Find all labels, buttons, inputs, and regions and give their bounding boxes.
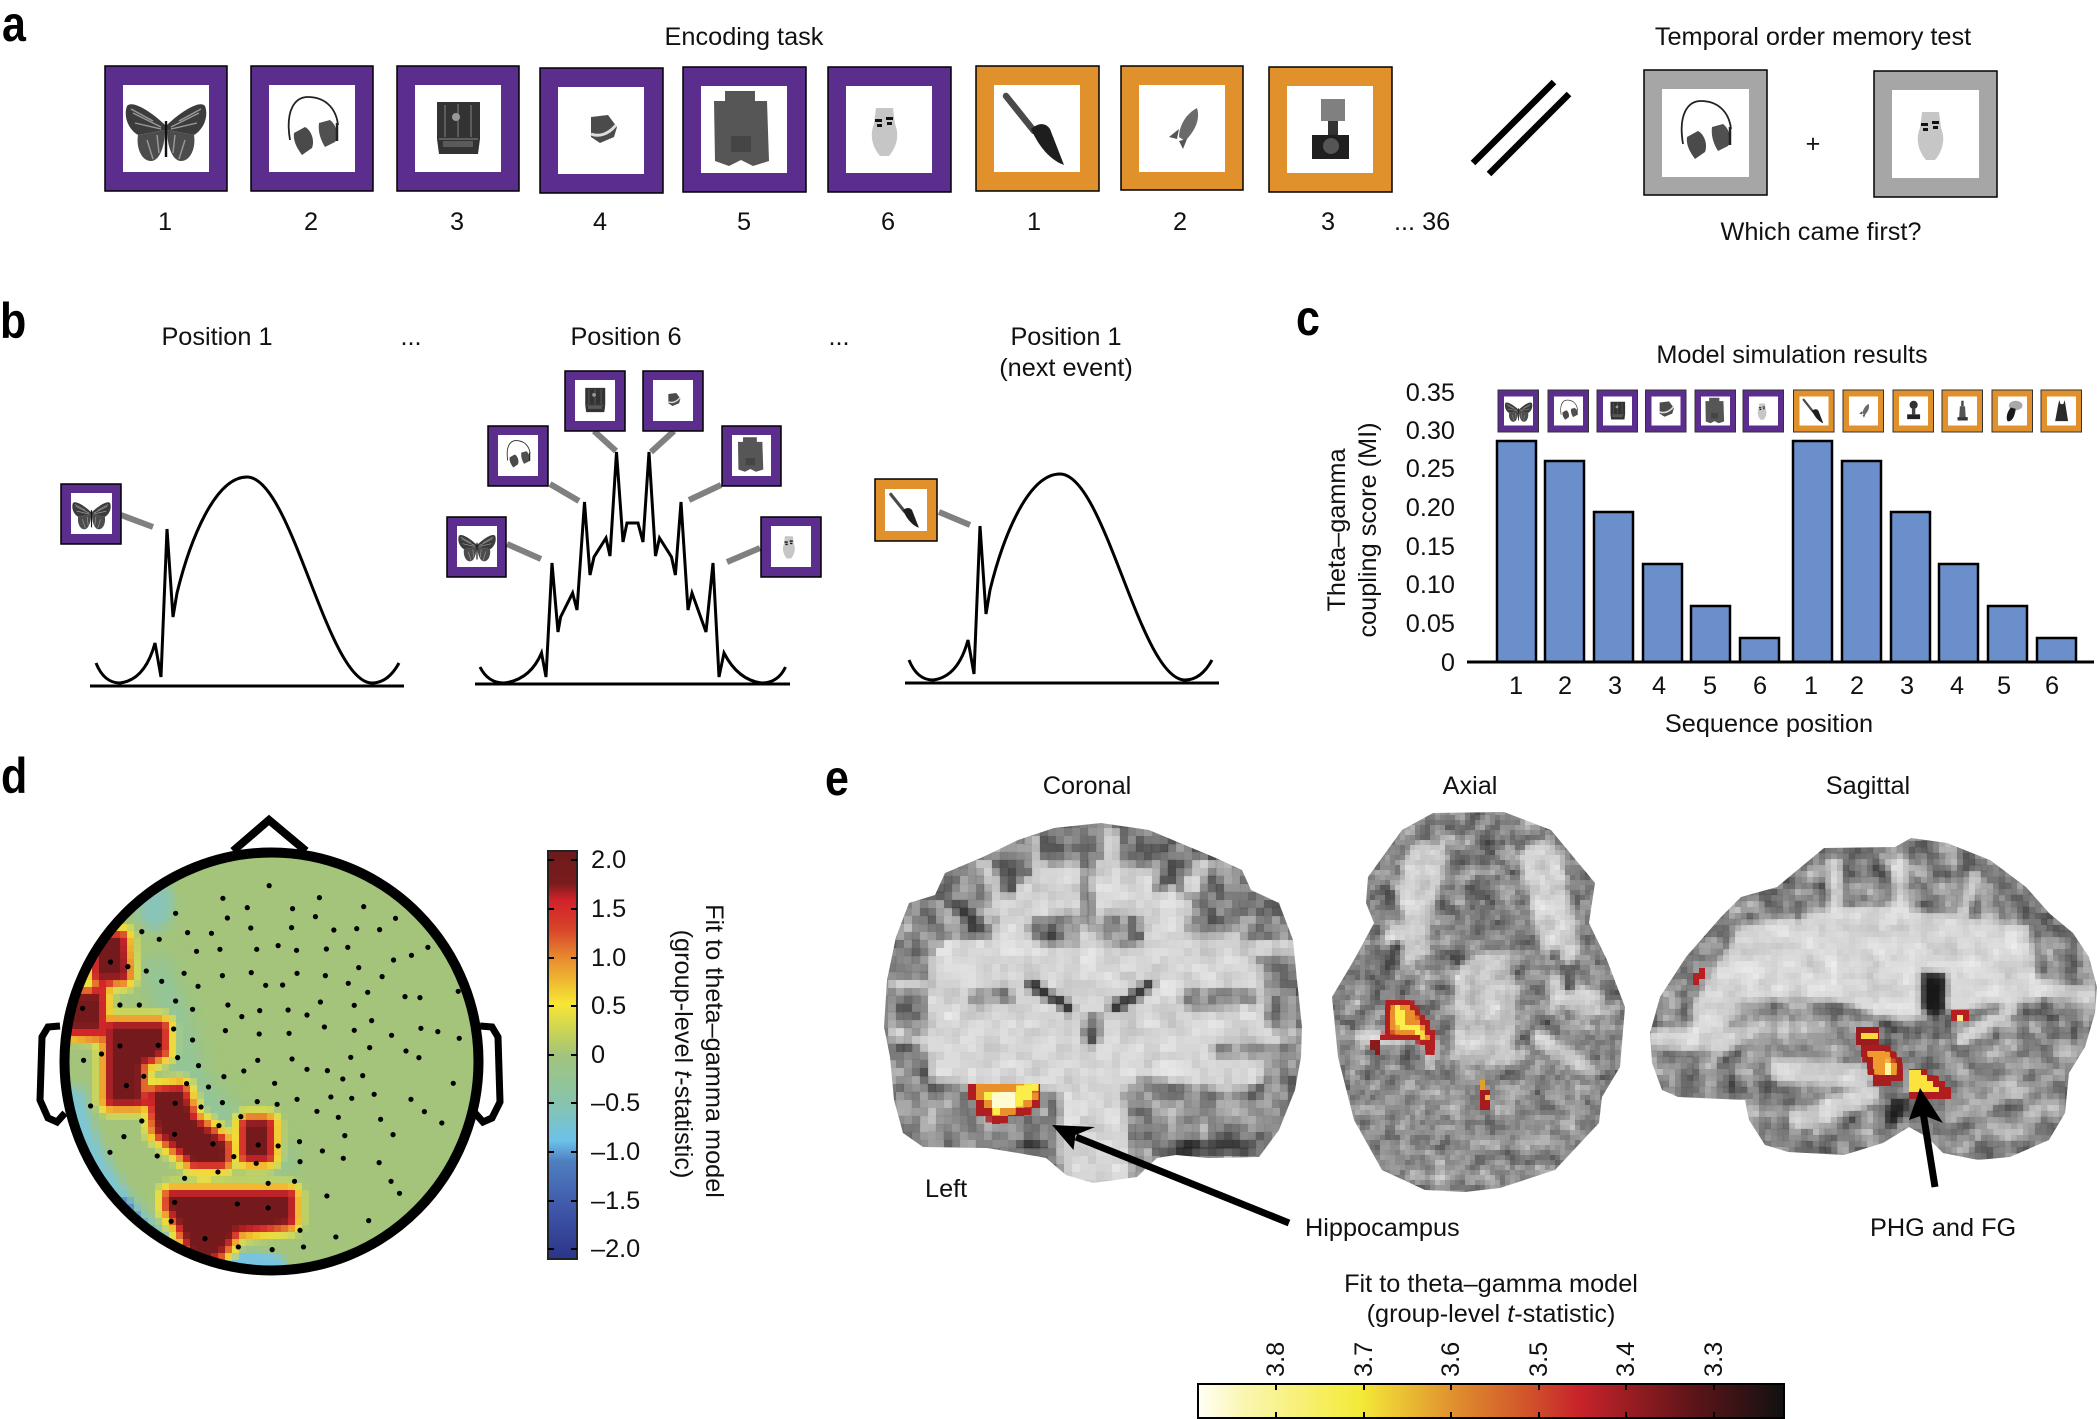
stimulus frame 1 butterfly: [105, 66, 227, 191]
colour bar title: (group-level t -statistic): [669, 930, 697, 1178]
panel: b theta waveforms: [0, 293, 1219, 686]
axial activation: [1372, 998, 1492, 1112]
stimulus frame 4 mask: [540, 68, 663, 193]
waveform position 6: [475, 452, 790, 684]
butterfly frame and connector: [61, 484, 153, 544]
x axis tick labels: 3: [1900, 672, 1914, 700]
heading axial: Axial: [1443, 772, 1497, 800]
ellipsis: ...: [400, 323, 422, 351]
colour bar: [548, 851, 577, 1259]
sequence position numbers: 4: [593, 208, 607, 236]
stimulus frame 7 trowel: [976, 66, 1099, 191]
legend title: Fit to theta–gamma model: [1344, 1270, 1638, 1298]
colour bar title: Fit to theta–gamma model: [700, 904, 728, 1198]
legend title: (group-level t-statistic): [1367, 1300, 1615, 1328]
electrode dots: [83, 886, 459, 1250]
heading position 1: Position 1: [161, 323, 273, 351]
legend tick labels: 3.7: [1350, 1342, 1378, 1377]
frame bowling pin: [727, 517, 821, 577]
x axis tick labels: 6: [2045, 672, 2059, 700]
heading coronal: Coronal: [1043, 772, 1131, 800]
stimulus frame 6 bowling pin: [828, 67, 951, 192]
panel: a encoding task and memory test: [2, 0, 1997, 246]
waveform position 1: [90, 477, 404, 686]
sequence position numbers: 6: [881, 208, 895, 236]
x axis tick labels: 5: [1703, 672, 1717, 700]
colour bar tick labels: –2.0: [591, 1235, 640, 1263]
colour bar tick labels: 1.0: [591, 944, 626, 972]
break marks: [1473, 82, 1569, 174]
legend tick labels: 3.8: [1262, 1342, 1290, 1377]
x axis tick labels: 6: [1753, 672, 1767, 700]
y axis tick labels: 0.25: [1406, 455, 1455, 483]
icon strip: [1498, 390, 2082, 432]
y axis title: coupling score (MI): [1354, 422, 1382, 638]
x axis tick labels: 2: [1850, 672, 1864, 700]
panel: c model simulation bar chart: [1296, 290, 2094, 738]
y axis tick labels: 0.30: [1406, 417, 1455, 445]
x axis tick labels: 3: [1608, 672, 1622, 700]
x axis line: [1467, 660, 2094, 664]
stimulus frame 9 camera: [1269, 67, 1392, 192]
panel: d scalp topography: [1, 748, 728, 1286]
stimulus frame 2 headphones: [251, 66, 373, 191]
waveform next event: [905, 474, 1219, 683]
colour bar tick labels: –1.0: [591, 1138, 640, 1166]
sequence position numbers: 2: [304, 208, 318, 236]
legend tick labels: [1262, 1342, 1728, 1377]
axial brain slice: [1332, 812, 1625, 1192]
colour bar tick labels: 1.5: [591, 895, 626, 923]
y axis tick labels: 0.15: [1406, 533, 1455, 561]
test frame bowling pin: [1874, 71, 1997, 197]
heading sagittal: Sagittal: [1826, 772, 1910, 800]
panel: e fMRI slices: [825, 750, 2100, 1418]
x axis tick labels: 4: [1950, 672, 1964, 700]
sequence position numbers: 3: [450, 208, 464, 236]
colour bar tick labels: [591, 846, 640, 1263]
colour bar tick labels: –0.5: [591, 1089, 640, 1117]
heading: encoding task: Encoding task: [665, 23, 824, 51]
heading position 6: Position 6: [570, 323, 682, 351]
question text: Which came first?: [1720, 218, 1922, 246]
ellipsis: ...: [828, 323, 850, 351]
panel letter b: b: [0, 293, 26, 349]
heading position 1 next event: Position 1: [1010, 323, 1122, 351]
legend tick labels: 3.5: [1525, 1342, 1553, 1377]
arrow to PHG and FG: [1909, 1088, 1943, 1187]
frame headphones: [488, 426, 579, 501]
label left: Left: [925, 1175, 967, 1203]
y axis tick labels: 0.35: [1406, 379, 1455, 407]
legend tick labels: 3.6: [1437, 1342, 1465, 1377]
stimulus frame 5 chair: [683, 67, 806, 192]
colour bar tick labels: 2.0: [591, 846, 626, 874]
sequence position numbers: 3: [1321, 208, 1335, 236]
colour bar tick labels: 0.5: [591, 992, 626, 1020]
x axis tick labels: 5: [1997, 672, 2011, 700]
y axis tick labels: 0.10: [1406, 571, 1455, 599]
topographic map: [70, 858, 474, 1266]
frame cabinet: [565, 371, 625, 451]
x axis title: Sequence position: [1665, 710, 1873, 738]
test frame headphones: [1644, 70, 1767, 195]
y axis tick labels: 0: [1441, 649, 1455, 677]
fixation cross: +: [1806, 130, 1820, 158]
x axis tick labels: 1: [1804, 672, 1818, 700]
x axis tick labels: 4: [1652, 672, 1666, 700]
colour bar tick labels: –1.5: [591, 1187, 640, 1215]
y axis title: [1323, 422, 1382, 638]
stimulus frame 3 cabinet: [397, 66, 519, 191]
sagittal brain slice: [1640, 830, 2100, 1170]
sequence position numbers: 2: [1173, 208, 1187, 236]
chart title: Model simulation results: [1656, 341, 1928, 369]
colour bar tick labels: 0: [591, 1041, 605, 1069]
x axis tick labels: 1: [1509, 672, 1523, 700]
sequence position numbers: 5: [737, 208, 751, 236]
head outline with nose and ears: [40, 820, 500, 1270]
y axis title: Theta–gamma: [1323, 448, 1351, 612]
stimulus frame 8 rocket: [1121, 66, 1243, 190]
panel letter e: e: [825, 750, 849, 806]
y axis tick labels: [1406, 379, 1455, 677]
sequence position numbers: ... 36: [1394, 208, 1450, 236]
legend tick labels: 3.3: [1700, 1342, 1728, 1377]
frame mask: [643, 371, 703, 452]
panel letter d: d: [1, 748, 27, 804]
arrow to hippocampus: [1052, 1125, 1289, 1223]
legend colour bar: [1198, 1384, 1784, 1418]
panel letter c: c: [1296, 290, 1320, 346]
x axis tick labels: 2: [1558, 672, 1572, 700]
colour bar title: [669, 904, 728, 1198]
x axis tick labels: [1509, 672, 2059, 700]
label hippocampus: Hippocampus: [1305, 1214, 1460, 1242]
legend tick labels: 3.4: [1612, 1342, 1640, 1377]
coronal brain slice: [875, 815, 1310, 1190]
sequence position numbers: 1: [1027, 208, 1041, 236]
label PHG and FG: PHG and FG: [1870, 1214, 2016, 1242]
heading: temporal order memory test: Temporal order memory test: [1655, 23, 1971, 51]
y axis tick labels: 0.20: [1406, 494, 1455, 522]
heading position 1 next event: (next event): [999, 354, 1133, 382]
trowel frame and connector: [875, 479, 970, 541]
frame butterfly: [447, 517, 541, 577]
sequence position numbers: [158, 208, 1450, 236]
bars: [1497, 441, 2076, 662]
y axis tick labels: 0.05: [1406, 610, 1455, 638]
coronal activation: [967, 1082, 1044, 1123]
sequence position numbers: 1: [158, 208, 172, 236]
sagittal activation: [1695, 970, 1968, 1100]
frame chair: [689, 426, 781, 500]
